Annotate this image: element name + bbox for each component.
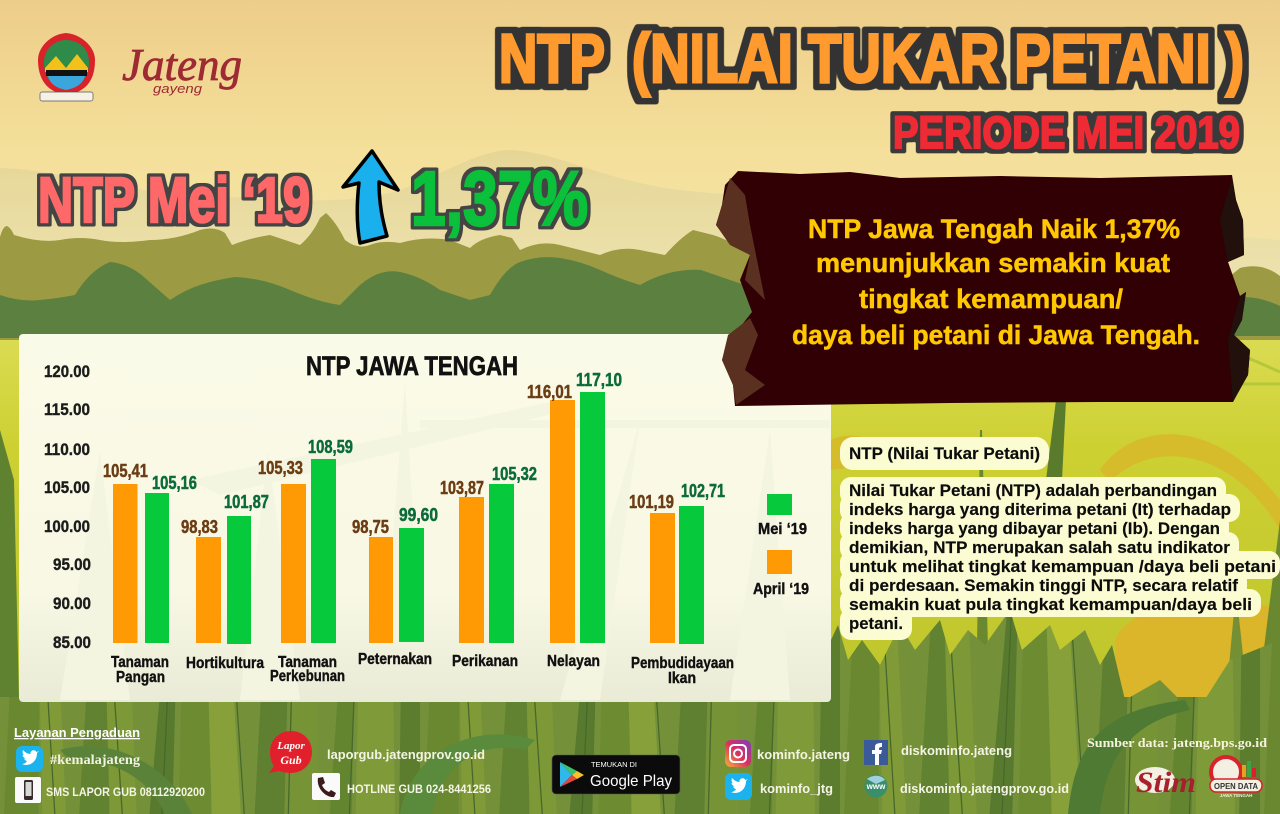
icon: instagram: [725, 740, 751, 767]
bars: Tanaman Perkebunan: [258, 437, 353, 685]
logo: Jateng Gayeng: Jateng: [122, 39, 242, 90]
bars: Nelayan: [527, 370, 622, 670]
y axis labels: 85.00: [53, 633, 91, 652]
chart title: NTP JAWA TENGAH: [306, 351, 518, 381]
google play badge: Google Play: [590, 773, 672, 790]
icon: facebook: [864, 740, 888, 765]
icon: lapor gub bubble: [269, 731, 312, 773]
y axis labels: 110.00: [44, 440, 90, 459]
logo: Siim: Stim: [1136, 766, 1196, 799]
sign text: [792, 214, 1200, 350]
icon: www globe: www: [866, 782, 886, 791]
icon: twitter: [725, 773, 752, 800]
info paragraph: indeks harga yang diterima petani (It) terhadap: [849, 501, 1231, 519]
bars: Peternakan: 99,60: [399, 505, 438, 525]
grass field right: [831, 610, 1280, 814]
bars: Perikanan: [440, 464, 537, 670]
lapor gub url: laporgub.jatengprov.go.id: [327, 747, 485, 762]
panel: chart: [19, 334, 831, 702]
bars: Nelayan: Nelayan: [547, 653, 600, 670]
data source: Sumber data: jateng.bps.go.id: [1087, 735, 1268, 750]
bars: Hortikultura: 101,87: [224, 492, 269, 512]
icon: up arrow: [343, 151, 398, 243]
heading: NTP Mei 19: NTP Mei ‘19: [38, 164, 310, 236]
tall grass blades right: [0, 400, 1280, 720]
sign text: tingkat kemampuan/: [859, 284, 1124, 314]
icon: telephone: [312, 773, 340, 800]
kominfo twitter handle: kominfo_jtg: [760, 781, 833, 796]
sign text: menunjukkan semakin kuat: [816, 248, 1170, 278]
background: sky: [0, 0, 1280, 340]
curved leaf bottom left: [60, 746, 192, 814]
footer: layanan pengaduan: Layanan Pengaduan: [14, 725, 140, 740]
sms lapor gub: SMS LAPOR GUB 08112920200: [46, 785, 205, 799]
footer: social media: [725, 740, 1069, 800]
burnt edge upper: [716, 178, 765, 300]
background: rice field: [0, 330, 1280, 730]
bars: Tanaman Pangan: 105,41: [103, 461, 148, 481]
background: green tree line right: [1228, 297, 1280, 336]
kominfo instagram handle: kominfo.jateng: [757, 747, 850, 762]
rice grains lower right: [1115, 600, 1280, 740]
bars: Hortikultura: [181, 492, 269, 672]
bars: Peternakan: 98,75: [352, 517, 389, 537]
legend: April ‘19: [753, 581, 809, 598]
bars: Pembudidayaan Ikan: 101,19: [629, 492, 674, 512]
y axis labels: 100.00: [44, 517, 90, 536]
y axis labels: 120.00: [44, 362, 90, 381]
bars: Tanaman Pangan: Pangan: [116, 669, 165, 686]
footer: lapor gub: [269, 731, 491, 800]
bars: Pembudidayaan Ikan: Ikan: [668, 670, 696, 687]
icon: play triangle: [560, 762, 584, 787]
bars: Peternakan: Peternakan: [358, 651, 432, 668]
grass field bottom: [0, 697, 1280, 814]
logo: Open Data: OPEN DATA: [1214, 782, 1258, 791]
background: olive tree line: [0, 213, 760, 340]
bars: Peternakan: [352, 505, 438, 668]
google play badge: [552, 755, 680, 794]
info paragraph: untuk melihat tingkat kemampuan /daya beli petani: [849, 558, 1276, 576]
bars: Nelayan: 116,01: [527, 382, 572, 402]
hotline: HOTLINE GUB 024-8441256: [347, 782, 491, 796]
title: NTP: [499, 20, 605, 97]
info paragraph: Nilai Tukar Petani (NTP) adalah perbandingan: [849, 482, 1217, 500]
info paragraph: semakin kuat pula tingkat kemampuan/daya beli: [849, 596, 1252, 614]
bars: Tanaman Perkebunan: 108,59: [308, 437, 353, 457]
figure: 1,37 percent: 1,37%: [411, 156, 588, 242]
background: olive tree line right: [1225, 266, 1280, 340]
bars: Hortikultura: 98,83: [181, 517, 218, 537]
diskominfo facebook handle: diskominfo.jateng: [901, 743, 1012, 758]
bars: Tanaman Perkebunan: Tanaman: [278, 654, 337, 671]
bars: Nelayan: 117,10: [576, 370, 622, 390]
logo: Open Data: [1210, 757, 1262, 798]
icon: www globe: [864, 774, 888, 798]
bars: Tanaman Pangan: Tanaman: [111, 654, 169, 671]
bars: Perikanan: Perikanan: [452, 653, 518, 670]
bars: Tanaman Pangan: [103, 461, 197, 686]
bars: Tanaman Perkebunan: Perkebunan: [270, 668, 345, 685]
board: [716, 171, 1250, 406]
y axis labels: 115.00: [44, 400, 90, 419]
bars: Pembudidayaan Ikan: Pembudidayaan: [631, 655, 734, 672]
footer: layanan pengaduan: [14, 725, 205, 803]
burnt edge right lower: [1228, 292, 1250, 402]
info paragraph: di perdesaan. Semakin tinggi NTP, secara relatif: [849, 577, 1239, 595]
legend: [753, 494, 809, 598]
icon: twitter: [16, 746, 43, 772]
icon: lapor gub bubble: Lapor: [276, 740, 305, 752]
logo: Open Data: JAWA TENGAH: [1220, 793, 1252, 798]
sign text: NTP Jawa Tengah Naik 1,37%: [808, 214, 1180, 244]
wooden sign: [716, 171, 1250, 406]
curved leaf bottom middle: [400, 734, 535, 814]
faint rice blades: [60, 382, 830, 700]
info paragraph: [849, 482, 1276, 633]
info heading: NTP (Nilai Tukar Petani): [849, 445, 1040, 463]
bars: Pembudidayaan Ikan: [629, 481, 734, 687]
bars: Tanaman Pangan: 105,16: [152, 473, 197, 493]
icon: mobile phone: [15, 777, 41, 803]
handle: kemalajateng: #kemalajateng: [50, 753, 140, 768]
sign text: daya beli petani di Jawa Tengah.: [792, 320, 1200, 350]
burnt edge right: [1220, 178, 1244, 262]
bars: Perikanan: 105,32: [492, 464, 537, 484]
info paragraph: indeks harga yang dibayar petani (Ib). Dengan: [849, 520, 1220, 538]
background: distant hills: [0, 150, 1280, 340]
bars: Tanaman Perkebunan: 105,33: [258, 458, 303, 478]
field furrows: [1230, 350, 1280, 384]
bars: Perikanan: 103,87: [440, 478, 484, 498]
y axis labels: [44, 362, 91, 652]
y axis labels: 105.00: [44, 478, 90, 497]
burnt edge lower: [722, 318, 765, 405]
y axis labels: 90.00: [53, 594, 91, 613]
rice panicle right: [830, 434, 1280, 530]
chart panel background: [19, 334, 831, 702]
info paragraph: petani.: [849, 615, 903, 633]
info box: [840, 437, 1280, 640]
logo: Jawa Tengah coat of arms: [38, 33, 95, 101]
google play badge: TEMUKAN DI: [591, 760, 637, 769]
y axis labels: 95.00: [53, 555, 91, 574]
icon: lapor gub bubble: Gub: [280, 753, 302, 767]
background: green tree line: [0, 257, 760, 338]
bars: Pembudidayaan Ikan: 102,71: [681, 481, 725, 501]
legend: Mei ‘19: [758, 521, 807, 538]
logo: Jateng Gayeng: gayeng: [153, 81, 203, 96]
info halo: [840, 437, 1280, 640]
bars: Hortikultura: Hortikultura: [186, 655, 264, 672]
info paragraph: demikian, NTP merupakan salah satu indikator: [849, 539, 1231, 557]
diskominfo website: diskominfo.jatengprov.go.id: [900, 781, 1069, 796]
curved leaf bottom right: [1068, 700, 1190, 814]
